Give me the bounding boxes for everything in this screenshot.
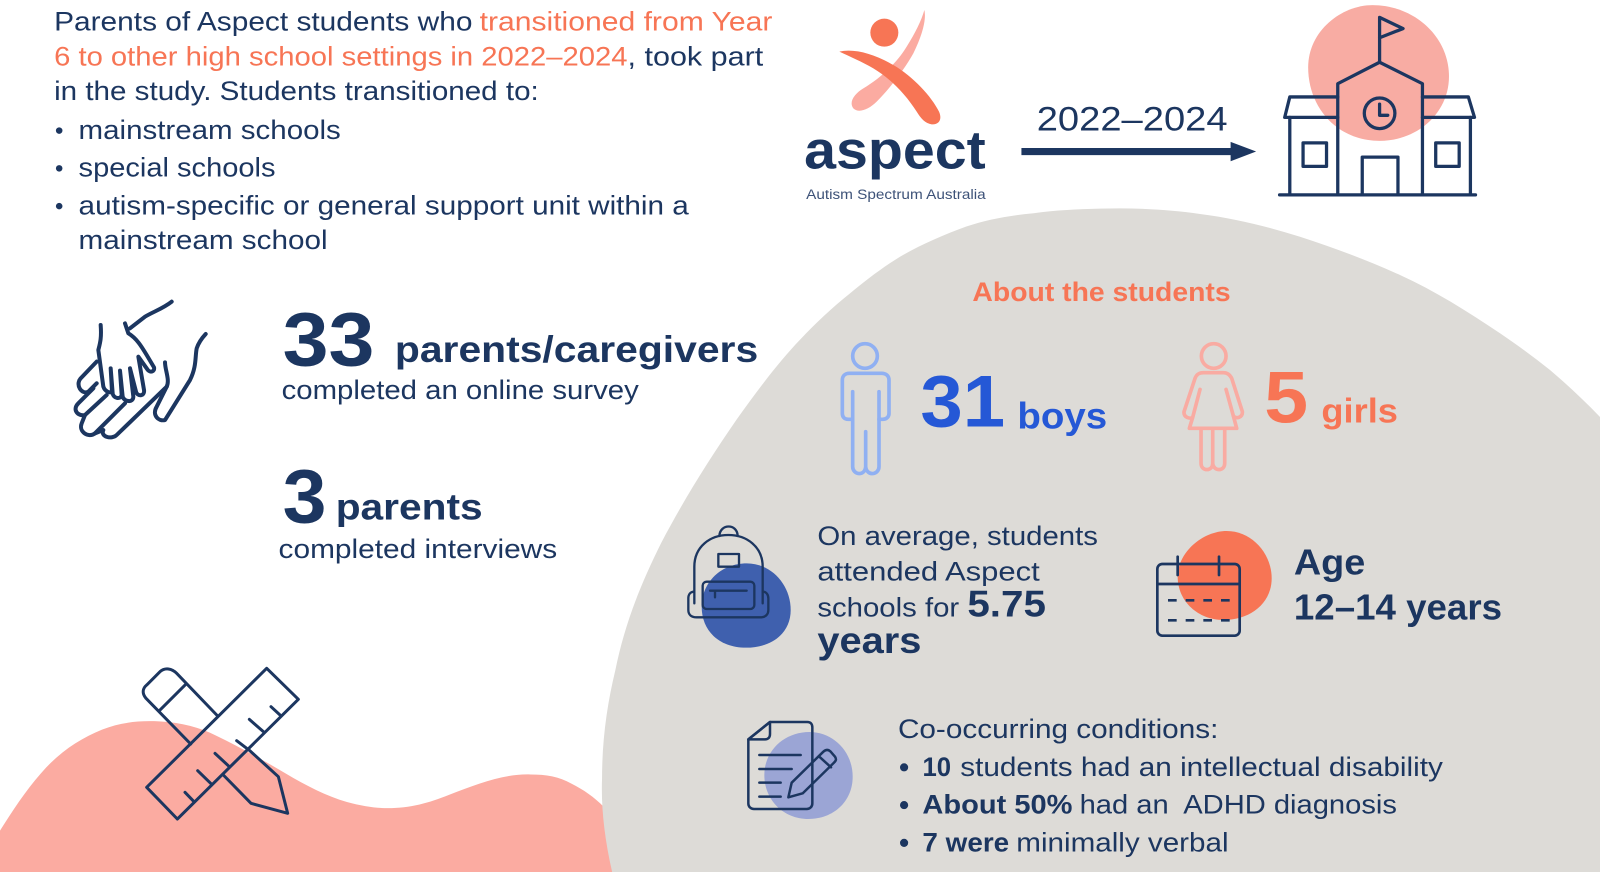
co-occurring conditions list: 10 (922, 752, 951, 782)
intro text: in the study. Students transitioned to: (54, 76, 539, 106)
date arrow: 2022–2024 (1037, 101, 1228, 139)
stat: age range (1294, 542, 1502, 627)
stat: boys: 31 (920, 360, 1005, 443)
co-occurring conditions list: 7 were (922, 828, 1009, 858)
icon: calendar (1157, 531, 1272, 636)
stat: parents interviewed: parents (336, 486, 483, 527)
icon: ruler and pencil (143, 668, 298, 819)
icon: document and pencil (748, 722, 853, 819)
co-occurring conditions list: Co-occurring conditions: (898, 714, 1218, 744)
stat: years at Aspect schools: On average, students (817, 521, 1098, 551)
icon: backpack (688, 527, 791, 648)
co-occurring conditions list: About 50% (922, 789, 1072, 819)
intro text: 6 to other high school settings in 2022–2024 (54, 41, 628, 71)
stat: girls: girls (1321, 392, 1398, 430)
grey background blob (602, 208, 1600, 872)
co-occurring conditions list: minimally verbal (1016, 828, 1229, 858)
stat: parents and caregivers surveyed (282, 297, 758, 405)
stat: girls: 5 (1264, 355, 1308, 438)
intro text: Parents of Aspect students who (54, 7, 472, 37)
stat: boys (920, 360, 1107, 443)
aspect logo (804, 10, 986, 203)
stat: years at Aspect schools: schools for (817, 592, 959, 622)
aspect logo: Autism Spectrum Australia (806, 187, 986, 203)
stat: years at Aspect schools: years (817, 620, 921, 661)
stat: boys: boys (1017, 396, 1107, 437)
icon: girl (1184, 344, 1242, 470)
date arrow (1021, 101, 1256, 161)
stat: parents and caregivers surveyed: completed an online survey (282, 375, 640, 405)
intro text: , took part (628, 41, 764, 71)
co-occurring conditions list (898, 714, 1444, 858)
stat: parents and caregivers surveyed: parents/caregivers (395, 329, 758, 370)
co-occurring conditions list: had an ADHD diagnosis (1080, 789, 1397, 819)
pink background blob (0, 721, 613, 872)
aspect logo: aspect (804, 120, 986, 180)
icon: hands (76, 302, 206, 437)
co-occurring conditions list: students had an intellectual disability (960, 752, 1444, 782)
icon: boy (842, 344, 889, 474)
stat: age range: 12–14 years (1294, 587, 1502, 627)
intro text: mainstream school (79, 225, 328, 255)
stat: parents and caregivers surveyed: 33 (283, 297, 374, 382)
intro text: special schools (79, 153, 276, 183)
intro text (54, 7, 773, 255)
heading: about the students: About the students (972, 277, 1231, 307)
stat: years at Aspect schools: 5.75 (967, 583, 1046, 624)
stat: girls (1264, 355, 1398, 438)
intro text: mainstream schools (79, 115, 341, 145)
stat: parents interviewed: completed interviews (279, 534, 557, 564)
icon: school (1280, 5, 1476, 195)
stat: age range: Age (1294, 542, 1365, 582)
stat: years at Aspect schools (817, 521, 1098, 661)
intro text: transitioned from Year (480, 7, 773, 37)
stat: parents interviewed: 3 (283, 454, 327, 539)
intro text: autism-specific or general support unit within a (79, 190, 689, 220)
stat: years at Aspect schools: attended Aspect (817, 557, 1041, 587)
stat: parents interviewed (279, 454, 557, 564)
